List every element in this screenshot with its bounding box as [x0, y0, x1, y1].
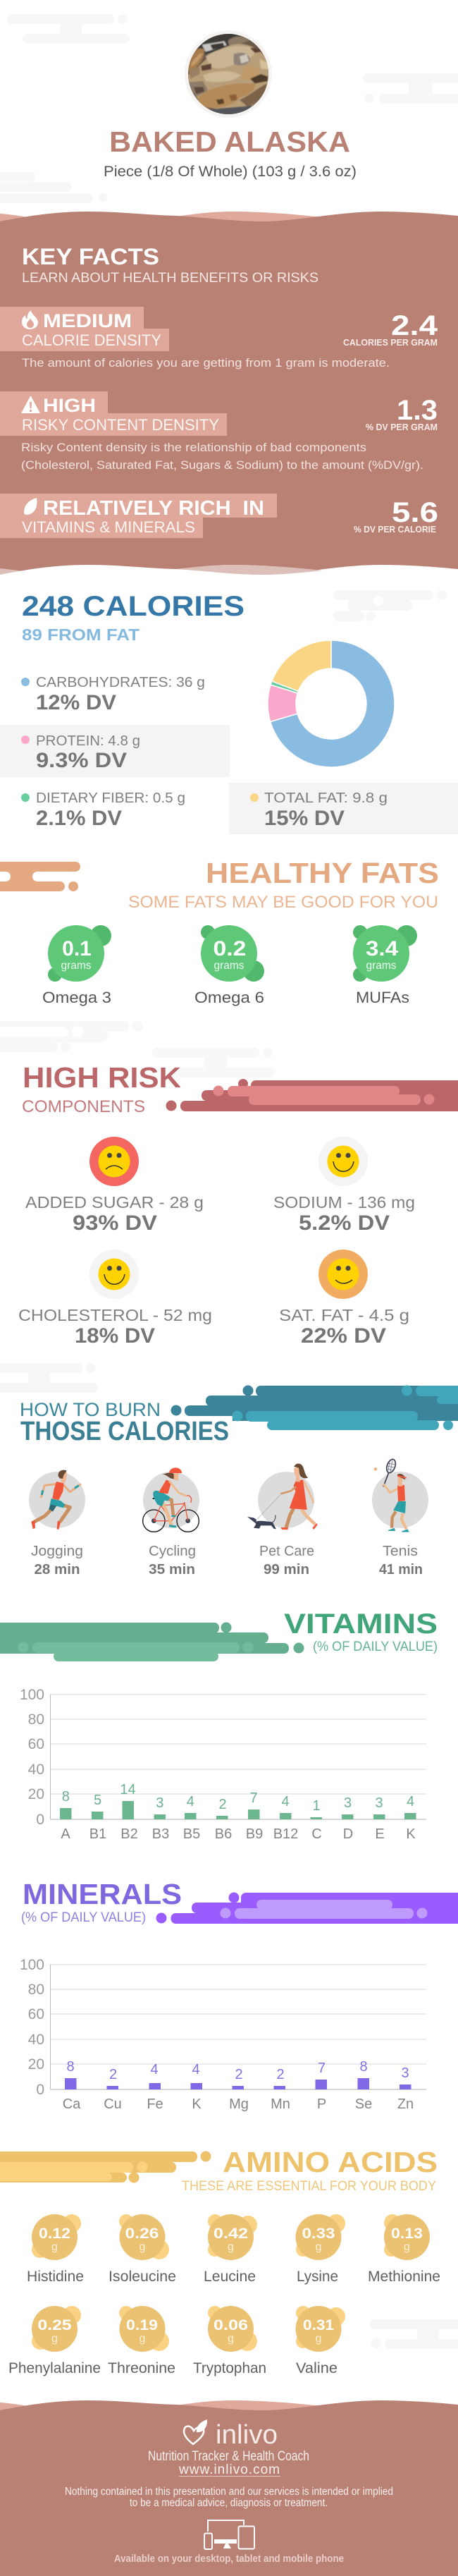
amino: tryptophan: 0.06 [213, 2317, 248, 2333]
item: saturated fat [279, 1250, 409, 1348]
chart: vitamins bar chart: 40 [28, 1762, 44, 1778]
amino: phenylalanine: Phenylalanine [8, 2360, 101, 2376]
chart: minerals bar chart: 3 [401, 2065, 409, 2081]
chart: minerals bar chart: Mg [229, 2096, 249, 2112]
chart: vitamins bar chart: 4 [281, 1794, 290, 1809]
activity: cycling: 35 min [149, 1562, 195, 1577]
amino: threonine [108, 2306, 175, 2376]
chart: minerals bar chart: 2 [109, 2067, 117, 2082]
badge: omega 3 [42, 925, 111, 1006]
chart: minerals bar chart [20, 1957, 426, 2112]
amino: valine: 0.31 [303, 2317, 334, 2333]
legend: dietary fiber: DIETARY FIBER: 0.5 g [36, 790, 185, 806]
chart: vitamins bar chart: 4 [187, 1794, 194, 1809]
legend: total fat [250, 790, 388, 830]
chart: vitamins bar chart [20, 1687, 426, 1842]
chart: minerals bar chart: Cu [104, 2096, 122, 2112]
legend: dietary fiber [21, 790, 185, 830]
badge: omega 6 [194, 925, 264, 1006]
panel: healthy fats [0, 857, 439, 1006]
legend: protein: PROTEIN: 4.8 g [36, 733, 140, 749]
chart: vitamins bar chart: B9 [246, 1826, 263, 1842]
activity: cycling [143, 1467, 199, 1577]
chart: vitamins bar chart: C [311, 1826, 322, 1842]
band: yellow [0, 2151, 211, 2183]
subheading: percent of daily value: (% OF DAILY VALUE) [21, 1910, 146, 1925]
item: added sugar: ADDED SUGAR - 28 g [25, 1193, 204, 1211]
callout: relatively rich in vitamins and minerals: RELATIVELY RICH IN [43, 497, 264, 520]
legend: dietary fiber: 2.1% DV [36, 807, 122, 830]
item: cholesterol [18, 1250, 212, 1348]
amino: phenylalanine: g [51, 2333, 58, 2345]
activity: tennis [372, 1458, 428, 1577]
chart: vitamins bar chart: B6 [215, 1826, 232, 1842]
callout: high risky content density: RISKY CONTENT DENSITY [22, 416, 219, 434]
panel: calories [0, 590, 458, 834]
chart: vitamins bar chart: 80 [28, 1711, 44, 1728]
photo: cookies [185, 30, 272, 118]
amino: isoleucine: 0.26 [125, 2226, 159, 2242]
subheading: healthy fats: SOME FATS MAY BE GOOD FOR YOU [128, 893, 438, 912]
amino: leucine: g [228, 2241, 234, 2253]
background clouds: header [0, 14, 458, 203]
heading: minerals: MINERALS [23, 1878, 182, 1910]
availability note: Available on your desktop, tablet and mobile phone [114, 2553, 344, 2565]
disclaimer: to be a medical advice, diagnosis or treatment. [130, 2497, 328, 2509]
chart: minerals bar chart: 2 [276, 2067, 285, 2082]
legend: carbohydrates: 12% DV [36, 691, 116, 714]
amino: leucine [204, 2214, 257, 2285]
heading: those calories: THOSE CALORIES [20, 1417, 229, 1446]
badge: omega 6: Omega 6 [194, 989, 264, 1006]
chart: vitamins bar chart: 14 [120, 1782, 136, 1797]
legend: total fat: TOTAL FAT: 9.8 g [264, 790, 388, 806]
chart: vitamins bar chart: E [375, 1826, 385, 1842]
chart: minerals bar chart: 100 [20, 1957, 44, 1973]
item: saturated fat: SAT. FAT - 4.5 g [279, 1306, 409, 1324]
amino: methionine [368, 2214, 440, 2285]
amino: methionine: Methionine [368, 2269, 440, 2285]
subtitle: serving size: Piece (1/8 Of Whole) (103 g / 3.6 oz) [104, 164, 357, 180]
activity: cycling: Cycling [149, 1544, 196, 1559]
activity: jogging: Jogging [31, 1544, 83, 1559]
chart: vitamins bar chart: 7 [249, 1790, 258, 1806]
amino: isoleucine: Isoleucine [109, 2269, 176, 2285]
chart: minerals bar chart: Fe [147, 2096, 163, 2112]
panel: high risk [18, 1061, 458, 1348]
item: added sugar [25, 1137, 204, 1235]
chart: minerals bar chart: 60 [28, 2006, 44, 2022]
chart: vitamins bar chart: K [406, 1826, 416, 1842]
chart: vitamins bar chart: 100 [20, 1687, 44, 1703]
chart: vitamins bar chart: B12 [273, 1826, 298, 1842]
title: BAKED ALASKA [109, 126, 350, 158]
item: sodium: SODIUM - 136 mg [273, 1193, 415, 1211]
callout: medium calorie density: CALORIE DENSITY [22, 331, 161, 349]
callout: relatively rich in vitamins and minerals: % DV PER CALORIE [354, 525, 436, 535]
website link: www.inlivo.com [178, 2462, 280, 2477]
callout: high risky content density: (Cholesterol, Saturated Fat, Sugars & Sodium) to the amount (%DV/gr). [21, 458, 423, 472]
chart: minerals bar chart: Ca [63, 2096, 81, 2112]
amino: tryptophan [193, 2306, 266, 2376]
item: saturated fat: 22% DV [301, 1324, 386, 1348]
chart: vitamins bar chart: 20 [28, 1786, 44, 1802]
amino: lysine [296, 2214, 345, 2285]
band: purple [156, 1893, 458, 1924]
amino: histidine: Histidine [27, 2269, 84, 2285]
amino: phenylalanine [8, 2306, 101, 2376]
panel: amino acids [0, 2146, 458, 2376]
amino: histidine [27, 2214, 84, 2285]
badge: MUFAs: MUFAs [356, 989, 409, 1006]
heading: vitamins: VITAMINS [284, 1609, 438, 1640]
chart: vitamins bar chart: B5 [183, 1826, 200, 1842]
chart: vitamins bar chart: D [343, 1826, 353, 1842]
chart: vitamins bar chart: A [61, 1826, 70, 1842]
chart: minerals bar chart: Se [355, 2096, 372, 2112]
chart: minerals bar chart: K [192, 2096, 202, 2112]
amino: leucine: 0.42 [213, 2226, 248, 2242]
callout: high risky content density: % DV PER GRAM [366, 422, 438, 432]
badge: MUFAs: 3.4 [366, 937, 398, 960]
panel: minerals [20, 1878, 458, 2112]
chart: minerals bar chart: 4 [150, 2062, 159, 2077]
callout: medium calorie density: 2.4 [391, 310, 438, 341]
activity: jogging [29, 1470, 85, 1577]
subheading: amino acids: THESE ARE ESSENTIAL FOR YOUR BODY [182, 2179, 436, 2194]
background cloud: burn [0, 1363, 98, 1393]
band: teal [171, 1385, 458, 1430]
amino: histidine: g [51, 2241, 58, 2253]
activity: tennis: Tenis [383, 1544, 418, 1559]
amino: tryptophan: Tryptophan [193, 2360, 266, 2376]
amino: leucine: Leucine [204, 2269, 256, 2285]
chart: vitamins bar chart: B1 [89, 1826, 106, 1842]
amino: methionine: 0.13 [391, 2226, 423, 2242]
amino: valine: Valine [296, 2360, 338, 2376]
icon: devices [204, 2520, 254, 2549]
legend: protein: 9.3% DV [36, 749, 127, 772]
callout: relatively rich in vitamins and minerals: VITAMINS & MINERALS [22, 518, 195, 536]
badge: MUFAs: grams [366, 960, 397, 972]
logo: inlivo: inlivo [216, 2420, 278, 2450]
chart: vitamins bar chart: B3 [152, 1826, 169, 1842]
item: cholesterol: CHOLESTEROL - 52 mg [18, 1306, 212, 1324]
amino: lysine: g [316, 2241, 321, 2253]
legend: carbohydrates [21, 675, 205, 714]
legend: protein [21, 733, 140, 772]
chart: vitamins bar chart: 2 [218, 1797, 227, 1812]
band: red [166, 1079, 458, 1111]
activity: jogging: 28 min [34, 1562, 80, 1577]
amino: methionine: g [404, 2241, 410, 2253]
amino: threonine: 0.19 [126, 2317, 158, 2333]
badge: omega 3: grams [61, 960, 92, 972]
icon: flame [22, 310, 38, 329]
amino: threonine: g [140, 2333, 145, 2345]
amino: isoleucine: g [140, 2241, 145, 2253]
amino: isoleucine [109, 2214, 176, 2285]
item: sodium [273, 1137, 415, 1235]
amino: lysine: Lysine [297, 2269, 338, 2285]
activity: pet care [247, 1464, 318, 1577]
activity: pet care: 99 min [264, 1562, 309, 1577]
callout: high risky content density: 1.3 [397, 395, 438, 426]
chart: macronutrient donut [268, 640, 395, 767]
legend: carbohydrates: CARBOHYDRATES: 36 g [36, 675, 205, 690]
disclaimer: Nothing contained in this presentation and our services is intended or implied [65, 2486, 393, 2498]
amino: lysine: 0.33 [302, 2226, 335, 2242]
badge: omega 6: 0.2 [213, 937, 247, 960]
amino: histidine: 0.12 [39, 2226, 70, 2242]
badge: MUFAs [353, 925, 417, 1006]
activity: tennis: 41 min [379, 1562, 423, 1577]
callout: medium calorie density: CALORIES PER GRAM [343, 338, 438, 348]
heading: calories: 248 CALORIES [22, 591, 245, 622]
heading: amino acids: AMINO ACIDS [223, 2146, 438, 2178]
band: green [0, 1622, 304, 1661]
chart: vitamins bar chart: 8 [62, 1789, 70, 1805]
item: sodium: 5.2% DV [299, 1211, 390, 1235]
chart: minerals bar chart: 80 [28, 1982, 44, 1998]
callout: relatively rich in vitamins and minerals: 5.6 [392, 497, 438, 528]
heading: how to burn: HOW TO BURN [20, 1399, 161, 1420]
logo: inlivo [184, 2419, 278, 2450]
amino: valine [296, 2306, 345, 2376]
subheading: components: COMPONENTS [22, 1097, 145, 1116]
chart: vitamins bar chart: 4 [407, 1794, 414, 1809]
amino: threonine: Threonine [108, 2360, 175, 2376]
tagline: Nutrition Tracker & Health Coach [148, 2449, 309, 2464]
subheading: key facts: LEARN ABOUT HEALTH BENEFITS OR RISKS [22, 270, 318, 286]
chart: minerals bar chart: 4 [192, 2062, 200, 2077]
chart: minerals bar chart: 8 [66, 2059, 75, 2075]
panel: vitamins [0, 1609, 438, 1842]
item: cholesterol: 18% DV [75, 1324, 155, 1348]
panel: key facts [0, 212, 458, 580]
chart: vitamins bar chart: 3 [156, 1795, 163, 1811]
chart: minerals bar chart: Zn [397, 2096, 414, 2112]
heading: key facts: KEY FACTS [22, 244, 159, 269]
chart: vitamins bar chart: B2 [120, 1826, 138, 1842]
callout: high risky content density: Risky Content density is the relationship of bad components [21, 441, 366, 454]
subheading: percent of daily value: (% OF DAILY VALUE) [313, 1640, 438, 1654]
chart: vitamins bar chart: 60 [28, 1736, 44, 1752]
badge: omega 6: grams [213, 960, 245, 972]
icon: warning triangle [21, 396, 40, 413]
heading: healthy fats: HEALTHY FATS [206, 857, 439, 889]
legend: total fat: 15% DV [264, 807, 345, 830]
amino: valine: g [316, 2333, 321, 2345]
chart: vitamins bar chart: 5 [94, 1793, 101, 1808]
chart: minerals bar chart: Mn [271, 2096, 290, 2112]
panel: how to burn those calories [20, 1385, 458, 1577]
panel: footer [0, 2400, 458, 2576]
background clouds: high risk [0, 1021, 275, 1078]
chart: minerals bar chart: P [317, 2096, 326, 2112]
callout: medium calorie density: The amount of calories you are getting from 1 gram is moderate. [22, 356, 390, 370]
badge: omega 3: 0.1 [62, 937, 92, 960]
amino: tryptophan: g [228, 2333, 234, 2345]
disclaimer [65, 2486, 393, 2509]
callout: medium calorie density [0, 307, 438, 370]
item: added sugar: 93% DV [73, 1211, 157, 1235]
chart: vitamins bar chart: 3 [375, 1795, 383, 1811]
chart: vitamins bar chart: 1 [312, 1798, 321, 1814]
icon: leaf [24, 498, 37, 515]
chart: vitamins bar chart: 0 [36, 1812, 44, 1828]
band: orange [0, 862, 80, 891]
chart: minerals bar chart: 7 [318, 2061, 326, 2076]
heading: high risk: HIGH RISK [23, 1061, 181, 1094]
badge: omega 3: Omega 3 [42, 989, 111, 1006]
amino: phenylalanine: 0.25 [38, 2317, 72, 2333]
chart: minerals bar chart: 8 [359, 2059, 368, 2075]
callout: medium calorie density: MEDIUM [43, 310, 132, 331]
chart: vitamins bar chart: 3 [344, 1795, 352, 1811]
highlight strips [0, 725, 458, 834]
chart: minerals bar chart: 2 [235, 2067, 243, 2082]
chart: minerals bar chart: 20 [28, 2056, 44, 2073]
subheading: from fat: 89 FROM FAT [22, 625, 140, 644]
callout: high risky content density [0, 391, 438, 472]
callout: high risky content density: HIGH [43, 395, 96, 416]
chart: minerals bar chart: 40 [28, 2032, 44, 2048]
activity: pet care: Pet Care [259, 1544, 314, 1559]
callout: relatively rich in vitamins and minerals [0, 494, 438, 538]
background cloud: amino [369, 2319, 458, 2349]
chart: minerals bar chart: 0 [36, 2082, 44, 2098]
